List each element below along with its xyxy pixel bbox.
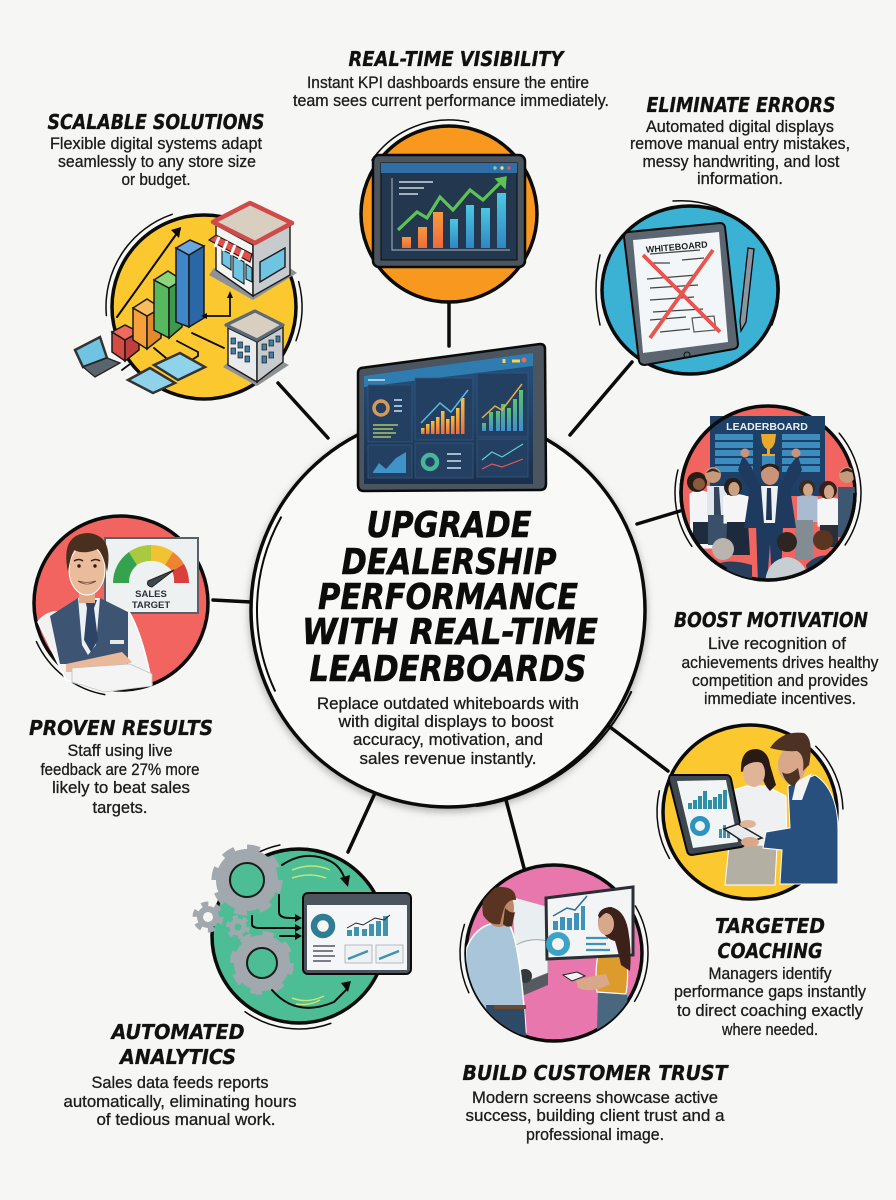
hub description: with digital displays to boost [337,712,554,731]
sales target sign: TARGET [132,600,170,611]
sales target sign [105,538,198,613]
heading: automated analytics: ANALYTICS [118,1045,236,1069]
panel: boost motivation [674,404,879,704]
text: eliminate errors description: remove manual entry mistakes, [630,134,850,153]
man from behind [466,887,526,1042]
woman jeans and sweater [595,957,628,1030]
title: DEALERSHIP [342,542,556,583]
sales target sign: SALES [135,589,167,600]
icon: blue circle with crossed-out whiteboard tablet: WHITEBOARD [645,239,709,255]
panel: real-time visibility [293,47,609,345]
text: boost motivation description [682,634,879,708]
hub description: accuracy, motivation, and [353,730,543,749]
laptop [75,337,120,377]
text: automated analytics description: automatically, eliminating hours [64,1092,296,1111]
text: proven results description: likely to beat sales [52,778,190,797]
panel: build customer trust [459,863,729,1144]
heading: real-time visibility: REAL-TIME VISIBILITY [348,47,566,71]
panel: eliminate errors [596,93,850,374]
text: boost motivation description: Live recognition of [708,634,846,653]
text: build customer trust description: professional image. [526,1125,664,1144]
text: eliminate errors description: Automated digital displays [646,117,834,136]
title: UPGRADE [366,505,532,546]
woman [725,749,787,885]
text: real-time visibility description: team sees current performance immediately. [293,91,609,110]
panel: central hub [182,340,716,874]
text: boost motivation description: competition and provides [692,671,868,690]
text: automated analytics description: of tedious manual work. [96,1110,276,1129]
hub description [317,694,579,768]
icon: orange circle with KPI tablet [318,83,580,345]
text: proven results description: targets. [92,798,148,817]
heading: build customer trust: BUILD CUSTOMER TRUST [462,1061,729,1085]
hub description: Replace outdated whiteboards with [317,694,579,713]
panel: automated analytics [64,806,429,1129]
connectors from hub to topic circles [213,298,680,868]
text: automated analytics description [64,1073,296,1129]
text: real-time visibility description: Instant KPI dashboards ensure the entire [307,73,589,92]
tablets [128,353,205,393]
icon: blue circle with crossed-out whiteboard tablet [596,201,779,374]
icon: coral circle with salesman and gauge [13,495,229,711]
icon: hero dashboard monitor [358,344,546,491]
heading: eliminate errors: ELIMINATE ERRORS [646,93,836,117]
panel: scalable solutions [48,110,324,427]
text: real-time visibility description [293,73,609,110]
title [302,505,598,690]
text: scalable solutions description [50,134,262,189]
heading: automated analytics: AUTOMATED [110,1020,245,1044]
text: targeted coaching description: performance gaps instantly [674,982,866,1001]
text: scalable solutions description: Flexible digital systems adapt [50,134,262,153]
heading: scalable solutions: SCALABLE SOLUTIONS [48,110,264,134]
text: proven results description [40,741,200,817]
hub description: sales revenue instantly. [360,749,536,768]
icon: coral circle with leaderboard crowd: LEADERBOARD [726,421,808,433]
salesman [38,533,152,692]
icon: yellow circle with coaching scene [618,680,882,944]
text: eliminate errors description: messy handwriting, and lost [642,152,840,171]
heading: targeted coaching [715,914,825,963]
panel: proven results [13,495,229,817]
text: build customer trust description: success, building client trust and a [466,1106,725,1125]
text: boost motivation description: immediate incentives. [704,689,856,708]
text: targeted coaching description: to direct coaching exactly [677,1001,863,1020]
icon: green circle with gears and report screen [169,806,429,1066]
text: eliminate errors description: information. [697,169,783,188]
text: targeted coaching description [674,964,866,1039]
showroom with car [512,897,548,996]
text: proven results description: Staff using live [68,741,172,760]
text: targeted coaching description: Managers identify [708,964,832,983]
panel: targeted coaching [618,680,882,1039]
text: boost motivation description: achievements drives healthy [682,653,879,672]
heading: automated analytics [110,1020,245,1069]
title: PERFORMANCE [318,577,578,618]
store building [209,203,297,300]
icon: yellow circle with growth bars and buildings [75,187,324,427]
heading: targeted coaching: COACHING [718,939,822,963]
man [763,733,838,884]
hub circle [251,413,645,807]
text: eliminate errors description [630,117,850,188]
text: build customer trust description [466,1088,725,1144]
text: build customer trust description: Modern screens showcase active [472,1088,718,1107]
heading: boost motivation: BOOST MOTIVATION [674,608,868,632]
heading: targeted coaching: TARGETED [715,914,825,938]
title: LEADERBOARDS [310,649,586,690]
sketch strokes around hub [182,340,716,874]
text: scalable solutions description: or budget. [122,170,190,189]
office building [223,311,289,386]
text: automated analytics description: Sales data feeds reports [92,1073,268,1092]
icon: pink circle with client and screen [459,863,649,1043]
text: scalable solutions description: seamlessly to any store size [58,152,256,171]
text: targeted coaching description: where needed. [721,1020,818,1039]
title: WITH REAL-TIME [302,612,598,653]
client screen [546,887,633,959]
heading: proven results: PROVEN RESULTS [29,716,213,740]
text: proven results description: feedback are 27% more [40,760,200,779]
icon: coral circle with leaderboard crowd [674,404,862,582]
